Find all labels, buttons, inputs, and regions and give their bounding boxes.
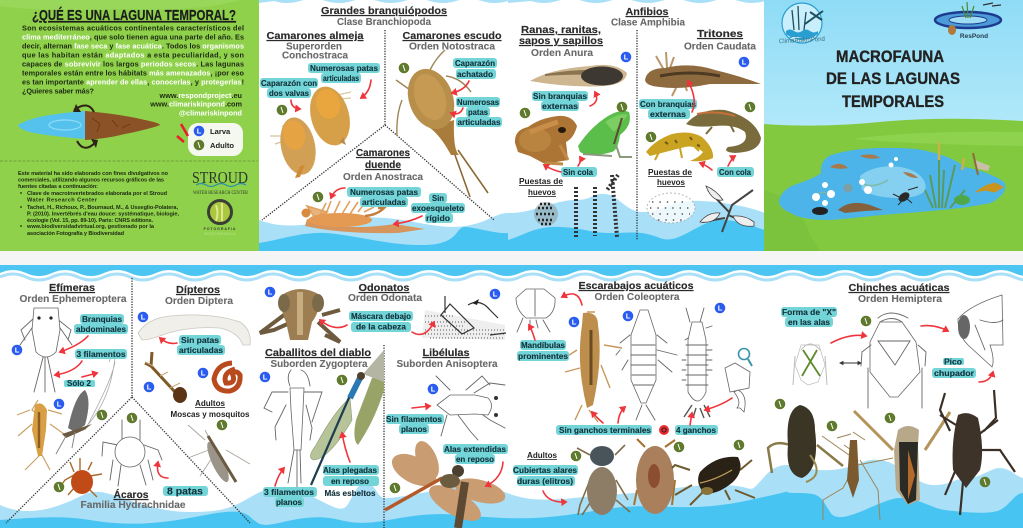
- organism: renacuajo: [530, 65, 627, 86]
- callout: numerosas patas articuladas: articuladas: [362, 198, 407, 207]
- subheading: Orden Odonata: Orden Odonata: [348, 293, 422, 304]
- callout: con branquias externas: [639, 99, 697, 119]
- text block: fuentes: fuentes citadas a continuación:: [18, 184, 98, 190]
- callout: numerosas patas articuladas: articuladas: [458, 118, 501, 127]
- title: macrofauna de las lagunas temporales: MACROFAUNA: [836, 47, 944, 66]
- heading: Ranas, ranitas, sapos y sapillos: Ranas, ranitas,: [521, 24, 601, 36]
- organism: salamandra amarilla: [646, 133, 713, 161]
- subheading: Orden Ephemeroptera: Orden Ephemeroptera: [20, 294, 127, 305]
- callout: branquias abdominales: Branquias: [82, 315, 123, 324]
- badges: larva y adulto: [520, 52, 755, 142]
- badges: larva y adulto: L: [141, 313, 146, 322]
- callout: forma de X en las alas: [781, 307, 837, 327]
- heading: Camarones almeja: Camarones almeja: [266, 30, 364, 42]
- text block: fuentes: Este material ha sido elaborado con fines divulgativos no: [18, 171, 169, 177]
- pond: [779, 148, 1005, 220]
- legend: larva y adulto: Adulto: [210, 141, 234, 150]
- callout: sin filamentos planos: Sin filamentos: [386, 415, 443, 424]
- organism: chinche pardusca: [854, 411, 950, 505]
- panel: anfibios: [508, 0, 765, 251]
- organism: ninfa de efímera, color: [17, 400, 64, 470]
- organism: ninfa de caballito: [264, 370, 322, 487]
- text block: definición: es tan importante aprender de ellas, conocerlas, y protegerlas!: [22, 77, 244, 86]
- subheading: Orden Anostraca: Orden Anostraca: [343, 172, 423, 183]
- label: puestas de huevos anuros: huevos: [528, 188, 557, 197]
- callout: sin patas articuladas: articuladas: [179, 346, 224, 355]
- subheading: Orden Caudata: Orden Caudata: [684, 42, 756, 52]
- badges: larva y adulto: L: [572, 318, 577, 327]
- arrows: hemiptera: [831, 326, 993, 382]
- text block: fuentes: P. (2010). Invertébrés d'eau douce: systématique, biologie,: [27, 212, 179, 218]
- callout: numerosas patas articuladas: Numerosas: [457, 98, 500, 107]
- text block: definición: clima mediterráneo, que solo tienen agua una parte del año. Es: [22, 32, 244, 41]
- heading: qué es una laguna temporal: ¿QUÉ ES UNA LAGUNA TEMPORAL?: [32, 7, 236, 24]
- callout: caparazón con dos valvas: dos valvas: [269, 89, 310, 98]
- badges: larva y adulto: L: [57, 400, 62, 409]
- callout: mandíbulas prominentes: [517, 340, 569, 361]
- organism: camarón duende: [302, 201, 425, 233]
- callout: numerosas patas articuladas: [308, 63, 380, 83]
- badges: larva y adulto: L: [263, 373, 268, 382]
- heading: Anfibios: Anfibios: [626, 6, 669, 18]
- callout: alas plegadas en reposo más esbeltos: Más esbeltos: [324, 489, 376, 498]
- label: puestas de huevos anuros: [519, 177, 564, 197]
- callout: caparazón con dos valvas: Caparazón con: [261, 79, 317, 88]
- callout: pico chupador: Pico: [944, 358, 962, 366]
- organism: escarabajo marrón: [634, 439, 675, 514]
- arrows: branquiópodos: [291, 80, 469, 224]
- text block: definición: ¿Quieres saber más?: [22, 86, 95, 95]
- heading: Camarones escudo: Camarones escudo: [402, 30, 502, 42]
- text block: definición: capaces de sobrevivir los largos periodos secos. Las lagunas: [22, 59, 244, 68]
- subheading: Suborden Anisoptera: Suborden Anisoptera: [396, 359, 498, 370]
- callout: alas extendidas en reposo: [443, 444, 508, 464]
- panel: qué es una laguna temporal: [0, 0, 259, 251]
- label: puestas de huevos urodelos: [648, 168, 693, 187]
- title: macrofauna de las lagunas temporales: TEMPORALES: [842, 92, 944, 111]
- illustration: cabeza de larva: [516, 289, 555, 332]
- text block: definición: Son ecosistemas acuáticos continentales característicos del: [22, 23, 244, 32]
- callout: caparazón achatado: Caparazón: [455, 59, 495, 68]
- organism: camarón escudo: [396, 50, 488, 197]
- icon: o: O: [661, 426, 667, 435]
- subheading: Suborden Zygoptera: Suborden Zygoptera: [270, 359, 368, 370]
- panel: grandes branquiópodos: [259, 0, 508, 251]
- callout: caparazón achatado: achatado: [457, 70, 493, 79]
- callout: branquias abdominales: abdominales: [76, 325, 127, 334]
- badges: larva y adulto: L: [147, 383, 152, 392]
- label: adultos moscas y mosquitos: [170, 399, 250, 419]
- badges: larva y adulto: L: [718, 304, 723, 313]
- text block: fuentes: [18, 171, 179, 237]
- heading: Grandes branquiópodos: Grandes branquiópodos: [321, 5, 447, 17]
- divider: [636, 30, 638, 240]
- callout: forma de X en las alas: Forma de "X": [782, 308, 836, 317]
- logo: ResPond: [935, 2, 1001, 40]
- text block: definición: temporales están entre los hábitats más amenazados, ¡por eso: [22, 68, 245, 77]
- heading: Camarones duende: duende: [365, 159, 401, 171]
- text block: fuentes: Tachet, H., Richoux, P., Bournaud, M., & Usseglio-Polatera,: [27, 205, 178, 211]
- organism: larva de escarabajo: [565, 312, 622, 422]
- text block: definición: que las habitan están adaptados a esta peculiaridad, y son: [22, 50, 244, 59]
- logo: ClimaRiskinPond: [779, 3, 825, 45]
- organism: larva dibujo: [616, 310, 677, 420]
- callout: sólo 2: Sólo 2: [67, 379, 92, 388]
- callout: sin branquias externas: Sin branquias: [533, 92, 588, 101]
- subheading: Orden Notostraca: Orden Notostraca: [409, 42, 495, 52]
- callout: caparazón con dos valvas: [260, 78, 318, 98]
- callout: numerosas patas articuladas: [456, 97, 502, 127]
- callout: mandíbulas prominentes: Mandíbulas: [521, 341, 566, 350]
- organism: ditisco: [672, 457, 755, 505]
- panel: odonatos: [260, 282, 508, 528]
- organism: nepa: [940, 390, 1015, 515]
- panel: escarabajos acuáticos: [513, 280, 755, 515]
- callout: mandíbulas prominentes: prominentes: [518, 352, 569, 361]
- text block: fuentes: comerciales, utilizando algunos recursos gráficos de las: [18, 178, 164, 184]
- heading: Ranas, ranitas, sapos y sapillos: [519, 24, 603, 47]
- callout: máscara debajo de la cabeza: de la cabeza: [356, 322, 407, 332]
- label: puestas de huevos urodelos: Puestas de: [648, 168, 693, 177]
- badges: larva y adulto: L: [624, 53, 629, 62]
- organism: camarón almeja: [270, 114, 321, 178]
- callout: sin filamentos planos: [386, 414, 444, 434]
- logo: Fotografía y Biodiversidad: BIODIVERSIDAD: [204, 231, 236, 236]
- panel: chinches acuáticas: [768, 282, 1015, 520]
- organism: ácaro rojo: [62, 458, 102, 497]
- callout: cubiertas alares duras: Cubiertas alares: [513, 466, 578, 475]
- legend: larva y adulto: [177, 123, 243, 156]
- callout: sin patas articuladas: [177, 335, 225, 355]
- organism: larva blanca: [138, 315, 250, 345]
- subheading: Superorden Conchostraca: Conchostraca: [282, 50, 348, 62]
- label: adultos moscas y mosquitos: Adultos: [195, 399, 226, 408]
- callout: sin patas articuladas: Sin patas: [181, 336, 220, 345]
- callout: sin exoesqueleto rígido: Sin: [432, 194, 444, 203]
- callout: numerosas patas articuladas: Numerosas patas: [350, 188, 419, 197]
- organism: rana verde: [578, 111, 632, 157]
- badges: adulto: [775, 316, 990, 487]
- label: puestas de huevos urodelos: huevos: [657, 178, 686, 187]
- arrows: coleoptera: [529, 294, 732, 502]
- callout: numerosas patas articuladas: [347, 187, 421, 207]
- icon: lupa: [738, 348, 752, 366]
- callout: sin branquias externas: externas: [542, 102, 579, 111]
- heading: Tritones: Tritones: [697, 28, 743, 40]
- organism: chinche alargada: [822, 432, 893, 520]
- callout: máscara debajo de la cabeza: Máscara debajo: [351, 312, 411, 321]
- callout: 3 filamentos planos: planos: [276, 498, 303, 507]
- callout: cubiertas alares duras: [513, 465, 578, 486]
- heading: Libélulas: Libélulas: [422, 347, 470, 359]
- subheading: Orden Diptera: Orden Diptera: [165, 296, 233, 307]
- badges: larva y adulto: L: [493, 290, 498, 299]
- subheading: Orden Hemiptera: Orden Hemiptera: [858, 294, 942, 305]
- callout: numerosas patas articuladas: patas: [468, 108, 489, 117]
- callout: 8 patas: 8 patas: [167, 486, 203, 498]
- heading: Dípteros: Dípteros: [176, 284, 220, 296]
- heading: Ranas, ranitas, sapos y sapillos: sapos y sapillos: [519, 35, 603, 47]
- callout: cubiertas alares duras: duras (elitros): [517, 477, 573, 486]
- subheading: Superorden Conchostraca: Superorden: [286, 42, 342, 52]
- text block: fuentes: www.biodiversidadvirtual.org, gestionado por la: [26, 224, 155, 230]
- badges: larva y adulto: L: [15, 346, 20, 355]
- badges: adulto: [277, 63, 409, 202]
- callout: numerosas patas articuladas: articuladas: [323, 74, 359, 83]
- callout: alas plegadas en reposo más esbeltos: en reposo: [331, 477, 369, 486]
- callout: pico chupador: chupador: [934, 369, 974, 378]
- callout: 3 filamentos planos: [263, 487, 317, 507]
- callout: numerosas patas articuladas: Numerosas patas: [310, 64, 379, 73]
- dividers: [6, 278, 250, 523]
- logo: Stroud: STROUD: [192, 168, 248, 187]
- heading: Escarabajos acuáticos: Escarabajos acuáticos: [578, 280, 694, 292]
- organism: libélula: [385, 438, 508, 528]
- divider: [383, 345, 385, 528]
- callout: 3 filamentos: 3 filamentos: [76, 350, 126, 359]
- logo: Stroud: [192, 168, 249, 196]
- callout: sin exoesqueleto rígido: rígido: [426, 214, 450, 223]
- subheading: Clase Amphibia: Clase Amphibia: [611, 18, 685, 28]
- callout: con branquias externas: externas: [650, 110, 687, 119]
- badges: larva y adulto: [569, 303, 744, 461]
- text block: fuentes: écologie (Vol. 15, pp. 89-10). Paris: CNRS éditions.: [27, 218, 153, 224]
- logo: Fotografía y Biodiversidad: [204, 200, 236, 236]
- text block: fuentes: Clave de macroinvertebrados elaborada por el Stroud: [27, 191, 168, 197]
- badges: larva y adulto: L: [268, 288, 273, 297]
- text block: enlaces: [149, 91, 243, 118]
- callout: alas extendidas en reposo: en reposo: [456, 455, 494, 464]
- callout: sin filamentos planos: planos: [401, 425, 428, 434]
- label: adultos: Adultos: [527, 451, 558, 460]
- badges: larva y adulto: L: [431, 385, 436, 394]
- heading: Odonatos: Odonatos: [358, 282, 410, 294]
- organism: larva ganchos: [682, 308, 712, 418]
- badges: larva y adulto: L: [201, 369, 206, 378]
- heading: Camarones duende: [356, 147, 410, 171]
- text block: definición: [22, 23, 245, 95]
- organism: sapo: [515, 116, 577, 164]
- arrows: odonatos: [275, 320, 503, 486]
- organism: ninfa de efímera, dibujo: [20, 308, 72, 392]
- callout: sin ganchos terminales: Sin ganchos terminales: [559, 426, 652, 435]
- organism: escarabajo gris: [577, 445, 630, 515]
- text block: enlaces: www.climariskinpond.com: [149, 100, 243, 108]
- panel: fila inferior, fondo: [0, 265, 1023, 528]
- text block: enlaces: www.respondproject.eu: [159, 91, 242, 100]
- callout: branquias abdominales: [74, 314, 128, 334]
- organism: ácaro dibujo: [102, 420, 162, 486]
- panel: efímeras, dípteros, ácaros: [6, 278, 250, 523]
- organism: tritón: [686, 110, 761, 153]
- callout: sin exoesqueleto rígido: exoesqueleto: [412, 204, 464, 213]
- title: macrofauna de las lagunas temporales: [826, 47, 960, 111]
- illustration: cabeza con pico: [958, 295, 1003, 367]
- panel: portada: [764, 0, 1023, 251]
- icon: o: [659, 425, 669, 435]
- callout: alas plegadas en reposo más esbeltos: [323, 465, 379, 498]
- organism: chinche oscura: [768, 405, 843, 482]
- callout: con cola: Con cola: [719, 168, 752, 177]
- legend: larva y adulto: L: [197, 127, 202, 136]
- organism: camarón almeja: [304, 82, 356, 150]
- text block: fuentes: Water Research Center: [27, 198, 98, 204]
- logo: Stroud: WATER RESEARCH CENTER: [193, 191, 249, 196]
- text block: definición: decir, alternan fase seca y fase acuática. Todos los organismos: [22, 41, 244, 50]
- callout: forma de X en las alas: en las alas: [788, 318, 831, 327]
- arrows: anfibios: [544, 81, 735, 172]
- callout: caparazón achatado: [453, 58, 497, 79]
- text block: fuentes: asociación Fotografía y Biodiversidad: [27, 231, 125, 237]
- callout: alas plegadas en reposo más esbeltos: Alas plegadas: [323, 466, 378, 475]
- logo: ResPond: ResPond: [960, 33, 988, 40]
- heading: Ácaros: Ácaros: [114, 488, 149, 501]
- text block: enlaces: @climariskinpond: [179, 108, 242, 118]
- arrows: efímeras y dípteros: [55, 336, 177, 478]
- dividers: [262, 30, 494, 220]
- badges: larva y adulto: L: [626, 312, 631, 321]
- organism: caballito del diablo: [310, 350, 384, 485]
- heading: Efímeras: Efímeras: [49, 282, 95, 294]
- waves: fondo: [259, 0, 508, 251]
- badges: larva y adulto: L: [742, 58, 747, 67]
- subheading: Familia Hydrachnidae: Familia Hydrachnidae: [80, 500, 186, 511]
- subheading: Orden Coleoptera: Orden Coleoptera: [594, 292, 680, 303]
- logo: Fotografía y Biodiversidad: FOTOGRAFIA: [204, 227, 236, 231]
- callout: 3 filamentos planos: 3 filamentos: [264, 488, 315, 497]
- subheading: Clase Branchiopoda: Clase Branchiopoda: [337, 17, 431, 28]
- legend: larva y adulto: Larva: [210, 127, 231, 136]
- organism: cabeza de ninfa: [260, 289, 340, 342]
- illustration: máscara de ninfa: [422, 296, 506, 340]
- callout: 4 ganchos: 4 ganchos: [676, 426, 717, 435]
- waves: fondo: [508, 0, 765, 251]
- callout: sin cola: Sin cola: [563, 168, 594, 177]
- callout: alas extendidas en reposo: Alas extendidas: [444, 445, 507, 454]
- badges: larva y adulto: [260, 287, 500, 493]
- subheading: Orden Anura: Orden Anura: [531, 48, 593, 59]
- callout: sin branquias externas: [532, 91, 588, 111]
- illustration: detalle de gancho: [725, 363, 750, 412]
- organisms and plants in pond: [812, 142, 1003, 215]
- heading: Camarones duende: Camarones: [356, 147, 410, 159]
- heading: Caballitos del diablo: Caballitos del diablo: [265, 347, 371, 359]
- badges: larva y adulto: [12, 312, 227, 492]
- organism: mosquito adulto: [188, 425, 250, 484]
- callout: sin exoesqueleto rígido: [411, 193, 465, 223]
- divider: [0, 160, 258, 162]
- illustration: huevos de tritón: [647, 186, 754, 232]
- organism: efímera adulta: [56, 352, 115, 454]
- label: adultos moscas y mosquitos: Moscas y mosquitos: [170, 410, 250, 419]
- label: puestas de huevos anuros: Puestas de: [519, 177, 564, 186]
- organism: larva de tritón: [645, 52, 761, 96]
- illustration: alas en X: [793, 344, 827, 385]
- illustration: chinche dibujo: [861, 313, 926, 408]
- callout: con branquias externas: Con branquias: [640, 100, 697, 109]
- top wave border: fila inferior: [0, 265, 1023, 280]
- organism: larva de mosquito: [145, 352, 187, 403]
- organism: ninfa de libélula: [436, 376, 505, 440]
- icon: ciclo de la laguna: [18, 104, 160, 148]
- illustration: huevos de rana: [534, 175, 618, 237]
- callout: máscara debajo de la cabeza: [349, 311, 413, 332]
- callout: pico chupador: [932, 358, 976, 378]
- grass: [764, 119, 1023, 251]
- subheading: Superorden Conchostraca: [282, 42, 348, 62]
- heading: Chinches acuáticas: Chinches acuáticas: [848, 282, 950, 294]
- logo: ClimaRiskinPond: ClimaRiskinPond: [779, 36, 825, 45]
- title: macrofauna de las lagunas temporales: DE LAS LAGUNAS: [826, 69, 960, 88]
- organism: gusano rojo: [214, 363, 240, 391]
